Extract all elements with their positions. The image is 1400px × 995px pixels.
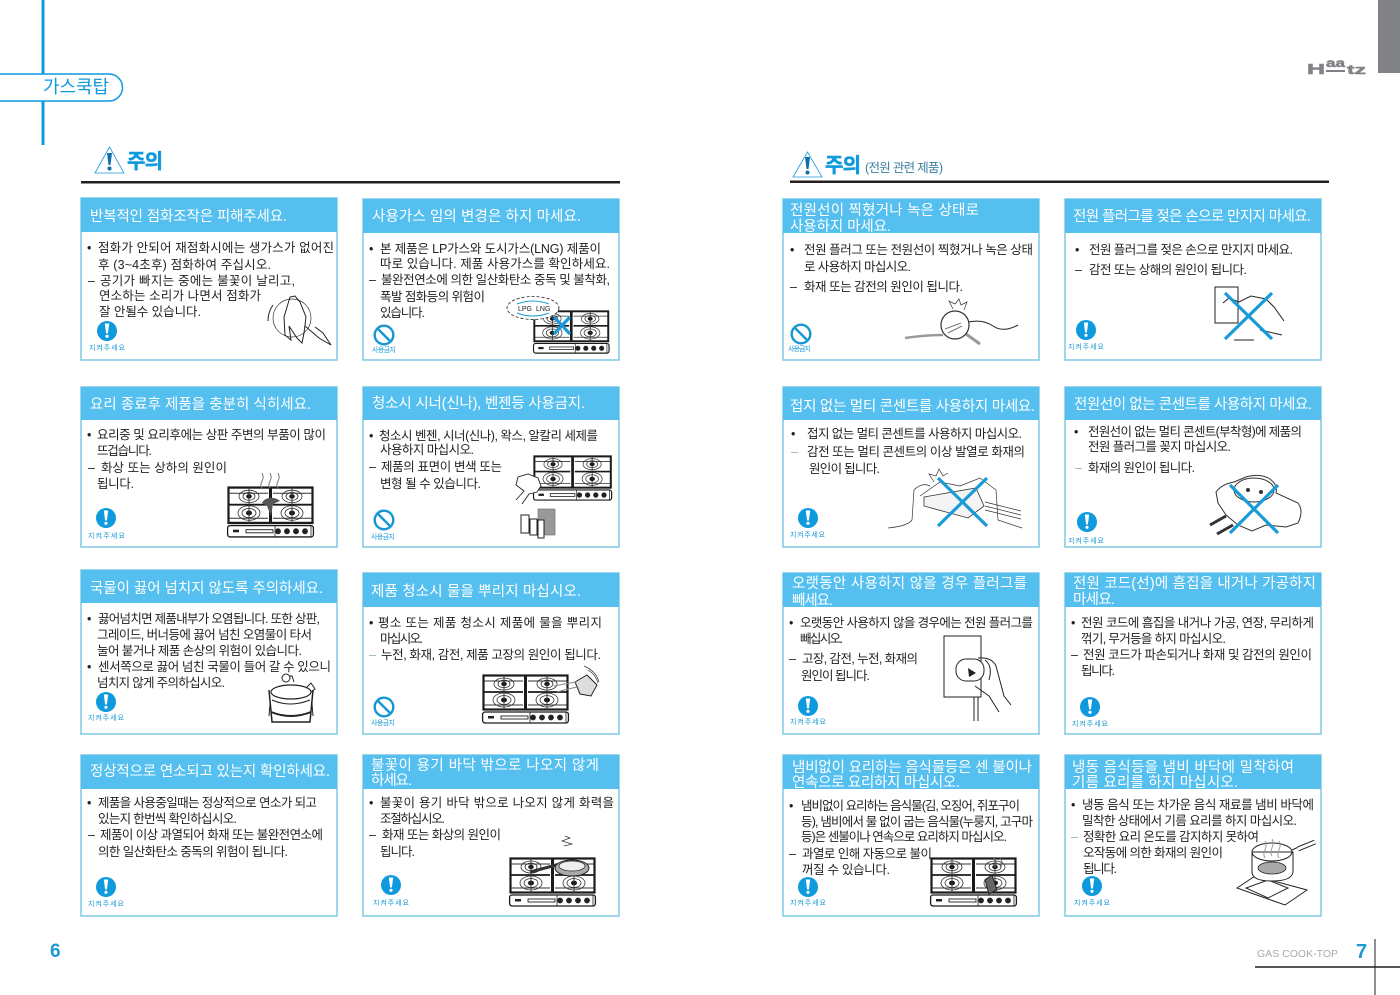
- icon: caution: [1068, 320, 1105, 351]
- panel text: 전원 코드가 파손되거나 화재 및 감전의 원인이: [1083, 648, 1312, 662]
- icon: caution: [88, 877, 125, 908]
- panel text: 화재 또는 감전의 원인이 됩니다.: [804, 280, 963, 294]
- panel text: –: [789, 847, 796, 861]
- panel text: –: [791, 445, 798, 459]
- panel heading: 전원선이 찍혔거나 녹은 상태로: [790, 202, 979, 219]
- panel text: 평소 또는 제품 청소시 제품에 물을 뿌리지: [378, 616, 602, 630]
- panel: unplug when not in use: [783, 573, 1039, 734]
- panel text: 조절하십시오.: [380, 812, 445, 826]
- illustration: cleaning cooktop and chemical bottles: [516, 456, 612, 538]
- panel: no cordless multi outlet: [1065, 387, 1321, 547]
- panel text: 밀착한 상태에서 기름 요리를 하지 마십시오.: [1082, 814, 1297, 828]
- heading: caution, left page: 주의: [127, 150, 163, 173]
- panel text: 제품이 이상 과열되어 화재 또는 불완전연소에: [100, 828, 323, 842]
- icon: prohibited: 사용금지: [788, 344, 811, 353]
- panel text: [790, 243, 1033, 294]
- icon: caution: 지켜주세요: [88, 713, 125, 722]
- panel text: [789, 616, 1033, 683]
- panel text: 누전, 화재, 감전, 제품 고장의 원인이 됩니다.: [381, 648, 601, 662]
- illustration: hot cooktop with hand: [228, 473, 313, 537]
- illustration: cooktop with crossed LPG and LNG: [507, 296, 609, 353]
- brand logo: Haatz: tz: [1347, 62, 1367, 77]
- heading: caution, power related parts, right page: 주의: [825, 154, 861, 177]
- panel text: 오랫동안 사용하지 않을 경우에는 전원 플러그를: [800, 616, 1033, 630]
- icon: caution: [373, 875, 410, 907]
- illustration: pan on cooktop: [510, 836, 595, 906]
- panel text: [87, 241, 334, 319]
- panel text: 정확한 요리 온도를 감지하지 못하여: [1083, 830, 1259, 844]
- panel text: [369, 796, 614, 859]
- panel heading: 오랫동안 사용하지 않을 경우 플러그를: [792, 575, 1027, 592]
- panel text: 눌어 붙거나 제품 손상의 위험이 있습니다.: [97, 644, 302, 658]
- panel heading: [783, 199, 1039, 235]
- panel text: 청소시 벤젠, 시너(신나), 왁스, 알칼리 세제를: [379, 429, 598, 443]
- panel heading: 정상적으로 연소되고 있는지 확인하세요.: [90, 763, 330, 780]
- panel text: •: [87, 660, 91, 674]
- icon: prohibited: [372, 326, 396, 354]
- icon: caution: 지켜주세요: [88, 899, 125, 908]
- panel text: 과열로 인해 자동으로 불이: [802, 847, 932, 861]
- panel text: •: [369, 429, 373, 443]
- illustration: overloaded power strip crossed out: [888, 469, 1022, 528]
- panel text: 있는지 한번씩 확인하십시오.: [98, 812, 237, 826]
- panel text: [791, 427, 1025, 476]
- panel: do not change gas type: [363, 199, 619, 360]
- panel: keep flame under vessel: [363, 755, 619, 916]
- panel text: [1074, 425, 1302, 475]
- illustration: three way adapter crossed out: [1210, 475, 1301, 534]
- panel text: •: [87, 612, 91, 626]
- panel text: [369, 616, 602, 662]
- panel text: •: [791, 427, 795, 441]
- brand logo: Haatz: H: [1307, 61, 1325, 78]
- panel text: –: [1071, 830, 1078, 844]
- panel: do not spray water: [363, 573, 619, 734]
- panel text: 전원 플러그 또는 전원선이 찍혔거나 녹은 상태: [804, 243, 1033, 257]
- panel text: 후 (3~4초후) 점화하여 주십시오.: [98, 258, 271, 272]
- panel heading: [363, 199, 619, 233]
- panel heading: 접지 없는 멀티 콘센트를 사용하지 마세요.: [790, 398, 1035, 415]
- panel: no wet hands on plug: [1065, 199, 1321, 360]
- panel heading: [363, 387, 619, 420]
- icon: prohibited: 사용금지: [371, 718, 395, 727]
- panel heading: 기름 요리를 하지 마십시오.: [1072, 774, 1238, 791]
- brand logo: Haatz: [1307, 56, 1367, 78]
- panel heading: 요리 종료후 제품을 충분히 식히세요.: [90, 396, 311, 413]
- panel heading: 불꽃이 용기 바닥 밖으로 나오지 않게: [371, 757, 599, 774]
- icon: prohibited: 사용금지: [371, 532, 395, 541]
- panel text: [369, 242, 610, 320]
- panel text: 원인이 됩니다.: [809, 462, 880, 476]
- panel heading: [1065, 573, 1321, 608]
- panel text: [87, 428, 326, 491]
- illustration: cooktop with crossed LPG and LNG: LPG: [518, 306, 532, 313]
- panel heading: [1065, 755, 1321, 791]
- panel text: 됩니다.: [1083, 862, 1117, 876]
- panel heading: 사용하지 마세요.: [790, 218, 891, 235]
- icon: caution: [790, 508, 826, 539]
- icon: caution: 지켜주세요: [88, 531, 126, 540]
- panel text: 원인이 됩니다.: [801, 669, 870, 683]
- icon: prohibited: [371, 511, 395, 541]
- icon: prohibited: 사용금지: [372, 345, 396, 354]
- illustration: cooktop with crossed LPG and LNG: LNG: [536, 306, 550, 313]
- panel heading: [81, 570, 337, 603]
- panel text: 연소하는 소리가 나면서 점화가: [99, 289, 261, 303]
- panel text: 변형 될 수 있습니다.: [380, 477, 481, 491]
- panel text: 불꽃이 용기 바닥 밖으로 나오지 않게 화력을: [380, 796, 614, 810]
- panel heading: [1065, 199, 1321, 233]
- icon: caution: 지켜주세요: [373, 898, 410, 907]
- panel text: 꺼질 수 있습니다.: [802, 863, 890, 877]
- panel text: 화재의 원인이 됩니다.: [1088, 461, 1195, 475]
- panel text: –: [1071, 648, 1078, 662]
- illustration: hand unplugging from wall: [944, 636, 1011, 721]
- icon: caution: 지켜주세요: [1068, 536, 1105, 545]
- panel text: 화상 또는 상하의 원인이: [101, 461, 227, 475]
- panel text: 잘 안될수 있습니다.: [99, 305, 201, 319]
- panel text: 등), 냄비에서 물 없이 굽는 음식물(누룽지, 고구마: [801, 815, 1033, 829]
- panel text: 센서쪽으로 끓어 넘친 국물이 들어 갈 수 있으니: [98, 660, 331, 674]
- panel text: [1075, 243, 1293, 277]
- panel heading: [783, 573, 1039, 609]
- panel: do not damage power cord: [1065, 573, 1321, 734]
- panel text: –: [369, 460, 376, 474]
- panel text: 뜨겁습니다.: [97, 444, 152, 458]
- icon: prohibited: [371, 698, 395, 727]
- icon: caution: [1074, 876, 1111, 907]
- panel text: 전원 플러그를 꽂지 마십시오.: [1088, 440, 1231, 454]
- panel text: [369, 429, 598, 491]
- illustration: boiling pot: [269, 674, 315, 722]
- panel text: 꺾기, 무거등을 하지 마십시오.: [1081, 632, 1226, 646]
- panel text: 빼십시오.: [800, 632, 843, 646]
- illustration: hand turning knob: [268, 296, 331, 345]
- panel text: 전원 코드에 흠집을 내거나 가공, 연장, 무리하게: [1081, 616, 1314, 630]
- panel text: 넘치지 않게 주의하십시오.: [97, 676, 225, 690]
- panel heading: 전원선이 없는 콘센트를 사용하지 마세요.: [1074, 396, 1312, 413]
- panel: avoid repeated ignition: [81, 198, 337, 360]
- panel text: –: [369, 648, 376, 662]
- icon: caution: [1068, 512, 1105, 545]
- icon: caution: [89, 321, 126, 352]
- panel heading: 전원 플러그를 젖은 손으로 만지지 마세요.: [1073, 208, 1311, 225]
- icon: caution: 지켜주세요: [1068, 342, 1105, 351]
- panel heading: 냄비없이 요리하는 음식물등은 센 불이나: [792, 759, 1032, 776]
- panel text: •: [790, 243, 794, 257]
- panel heading: [1065, 387, 1321, 420]
- illustration: wet hand at outlet crossed out: [1215, 287, 1284, 340]
- heading: caution, power related parts, right page: (전원 관련 제품): [865, 161, 943, 175]
- panel text: 됩니다.: [380, 845, 415, 859]
- panel heading: [783, 387, 1039, 420]
- panel text: –: [88, 461, 95, 475]
- panel text: 오작동에 의한 화재의 원인이: [1083, 846, 1223, 860]
- panel text: 불완전연소에 의한 일산화탄소 중독 및 불착화,: [381, 273, 610, 287]
- illustration: water poured on cooktop: [483, 666, 599, 723]
- icon: caution: [1072, 697, 1109, 728]
- icon: warning triangle: [793, 152, 822, 177]
- panel text: –: [88, 828, 95, 842]
- panel text: 전원 플러그를 젖은 손으로 만지지 마세요.: [1089, 243, 1293, 257]
- panel: foods cooked without pot: [783, 755, 1039, 916]
- panel text: –: [369, 273, 376, 287]
- panel text: [789, 799, 1033, 877]
- panel heading: [81, 198, 337, 232]
- panel heading: 반복적인 점화조작은 피해주세요.: [90, 208, 287, 225]
- panel heading: 청소시 시너(신나), 벤젠등 사용금지.: [372, 395, 585, 412]
- panel heading: 빼세요.: [792, 592, 833, 609]
- panel heading: 하세요.: [371, 772, 412, 789]
- icon: prohibited: [788, 325, 811, 353]
- icon: warning triangle: [95, 147, 124, 173]
- panel text: 요리중 및 요리후에는 상판 주변의 부품이 많이: [97, 428, 326, 442]
- icon: caution: [88, 508, 126, 540]
- panel: confirm normal combustion: [81, 755, 337, 916]
- panel text: •: [1071, 798, 1075, 812]
- panel text: [87, 796, 323, 859]
- panel text: •: [789, 616, 793, 630]
- panel text: [1071, 798, 1314, 876]
- panel text: •: [789, 799, 793, 813]
- illustration: cooktop grilling food: [931, 858, 1016, 906]
- panel text: •: [1071, 616, 1075, 630]
- panel text: 공기가 빠지는 중에는 불꽃이 날리고,: [100, 274, 295, 288]
- chapter tab: gas cooktop: [0, 0, 122, 145]
- panel text: •: [87, 241, 91, 255]
- panel heading: 마세요.: [1073, 591, 1115, 608]
- panel text: 등)은 센불이나 연속으로 요리하지 마십시오.: [801, 830, 1007, 844]
- panel heading: [783, 755, 1039, 791]
- panel text: 접지 없는 멀티 콘센트를 사용하지 마십시오.: [807, 427, 1022, 441]
- panel text: 따로 있습니다. 제품 사용가스를 확인하세요.: [380, 257, 610, 271]
- panel text: 전원선이 없는 멀티 콘센트(부착형)에 제품의: [1088, 425, 1302, 439]
- panel text: 화재 또는 화상의 원인이: [382, 828, 501, 842]
- panel: no ungrounded multi outlet: [783, 387, 1039, 547]
- panel heading: 제품 청소시 물을 뿌리지 마십시오.: [371, 583, 581, 600]
- panel heading: [363, 755, 619, 789]
- icon: caution: 지켜주세요: [89, 343, 126, 352]
- panel text: 점화가 안되어 재점화시에는 생가스가 없어진: [98, 241, 334, 255]
- panel text: •: [369, 242, 373, 256]
- panel text: •: [1074, 425, 1078, 439]
- panel text: 고장, 감전, 누전, 화재의: [802, 652, 918, 666]
- panel text: –: [88, 274, 95, 288]
- icon: caution: [88, 692, 125, 722]
- panel text: •: [87, 796, 91, 810]
- panel text: 그레이드, 버너등에 끓어 넘친 오염물이 타서: [97, 628, 312, 642]
- panel text: –: [1075, 461, 1082, 475]
- illustration: pot on burner trivet: [1237, 839, 1315, 905]
- panel text: 제품의 표면이 변색 또는: [381, 460, 502, 474]
- panel text: •: [87, 428, 91, 442]
- panel: prevent boil over: [81, 570, 337, 734]
- panel text: •: [369, 796, 373, 810]
- icon: caution: 지켜주세요: [1072, 719, 1109, 728]
- panel: frozen food oil cooking: [1065, 755, 1321, 916]
- panel text: 됩니다.: [97, 477, 134, 491]
- chapter tab: gas cooktop: 가스쿡탑: [43, 77, 109, 97]
- panel text: –: [789, 652, 796, 666]
- panel heading: 사용가스 임의 변경은 하지 마세요.: [372, 208, 581, 225]
- panel heading: [81, 387, 337, 420]
- panel text: –: [1075, 263, 1082, 277]
- heading: caution, left page: [95, 147, 163, 173]
- panel text: [1071, 616, 1314, 678]
- panel text: –: [790, 280, 797, 294]
- panel text: –: [369, 828, 376, 842]
- panel text: 사용하지 마십시오.: [380, 443, 474, 457]
- icon: caution: 지켜주세요: [790, 717, 827, 726]
- panel heading: [81, 755, 337, 789]
- panel heading: 국물이 끓어 넘치지 않도록 주의하세요.: [90, 580, 323, 597]
- panel: damaged power cord: [783, 199, 1039, 360]
- panel text: 냄비없이 요리하는 음식물(김, 오징어, 쥐포구이: [801, 799, 1020, 813]
- panel text: 끓어넘치면 제품내부가 오염됩니다. 또한 상판,: [98, 612, 320, 626]
- icon: caution: 지켜주세요: [1074, 898, 1111, 907]
- panel text: •: [1075, 243, 1079, 257]
- page number 6: 6: [50, 941, 61, 962]
- brand logo: Haatz: aa: [1326, 56, 1345, 70]
- icon: caution: [790, 696, 827, 726]
- panel text: 감전 또는 멀티 콘센트의 이상 발열로 화재의: [807, 445, 1025, 459]
- panel text: [87, 612, 331, 690]
- page number 7: 7: [1356, 941, 1367, 963]
- panel: cool down after cooking: [81, 387, 337, 547]
- heading: caution, power related parts, right page: [793, 152, 943, 177]
- grey corner tab: [1378, 0, 1400, 73]
- icon: caution: 지켜주세요: [790, 898, 827, 907]
- panel text: 있습니다.: [380, 306, 425, 320]
- panel text: •: [369, 616, 373, 630]
- panel heading: 냉동 음식등을 냄비 바닥에 밀착하여: [1072, 759, 1294, 776]
- icon: caution: 지켜주세요: [790, 530, 826, 539]
- panel text: 냉동 음식 또는 차가운 음식 재료를 냄비 바닥에: [1082, 798, 1314, 812]
- panel text: 폭발 점화등의 위험이: [380, 290, 485, 304]
- panel text: 본 제품은 LP가스와 도시가스(LNG) 제품이: [380, 242, 601, 256]
- panel text: 의한 일산화탄소 중독의 위험이 됩니다.: [98, 845, 288, 859]
- panel text: 됩니다.: [1081, 664, 1115, 678]
- panel heading: 전원 코드(선)에 흠집을 내거나 가공하지: [1073, 574, 1316, 592]
- panel text: 제품을 사용중일때는 정상적으로 연소가 되고: [98, 796, 317, 810]
- panel heading: 연속으로 요리하지 마십시오.: [792, 774, 960, 791]
- panel text: 감전 또는 상해의 원인이 됩니다.: [1089, 263, 1247, 277]
- footer: gas cook-top label: GAS COOK-TOP: [1257, 948, 1338, 960]
- panel text: 마십시오.: [380, 632, 423, 646]
- icon: caution: [790, 877, 827, 907]
- panel: do not use thinner or benzene: [363, 387, 619, 547]
- panel heading: [363, 573, 619, 607]
- panel text: 로 사용하지 마십시오.: [804, 260, 911, 274]
- illustration: damaged cord under magnifier: [905, 299, 1018, 344]
